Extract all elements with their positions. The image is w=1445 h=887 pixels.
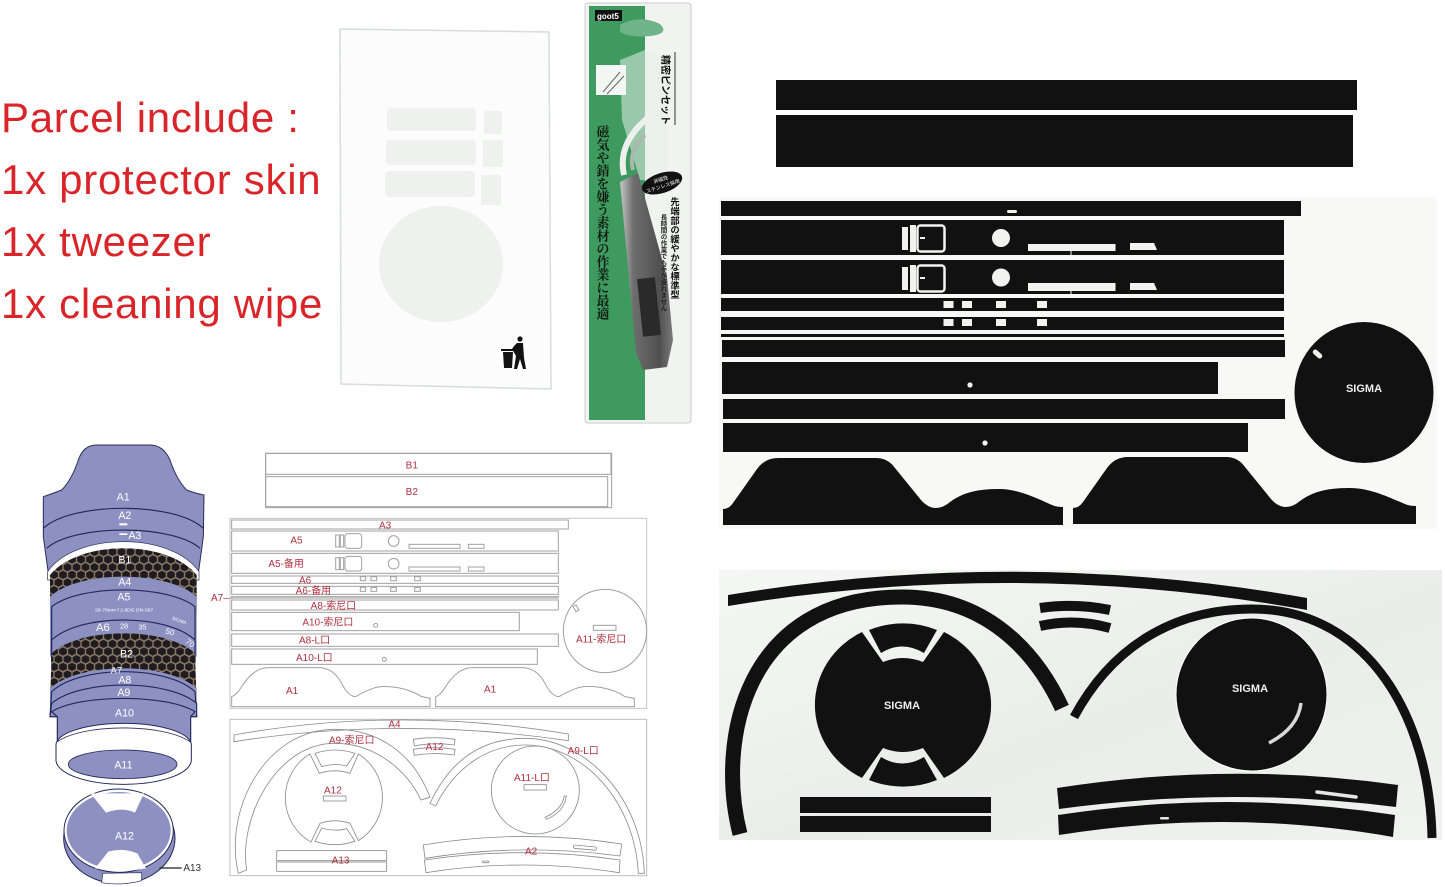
labels: A1 [286, 686, 299, 697]
labels [268, 460, 626, 697]
text: cleaning wipe: 1x cleaning wipe [1, 280, 323, 327]
B1 honeycomb band [50, 548, 197, 613]
callout line to A13 [159, 866, 182, 870]
part labels: A6 [96, 622, 110, 634]
labels: A12 [426, 742, 444, 753]
text: small note: 長時間の作業でも手が疲れません [659, 214, 669, 312]
A9 left outline [235, 729, 430, 873]
A2 curved strips [1057, 774, 1398, 837]
part labels: A11 [114, 760, 133, 772]
A9 thin arc [1074, 609, 1432, 838]
front ring and A11 [56, 723, 191, 784]
panel: template outline sheet one [230, 453, 647, 708]
lens cap A12 [64, 789, 175, 884]
labels: A10-L口 [296, 653, 333, 664]
part labels: 35 [138, 622, 146, 631]
labels: A5-备用 [268, 557, 304, 570]
label: A7 callout: A7— [211, 593, 233, 604]
part labels: A4 [118, 577, 131, 589]
labels: A6-备用 [296, 584, 331, 597]
A4 outline [234, 720, 568, 742]
A9 right outline [430, 738, 644, 873]
labels: A1 [484, 684, 497, 695]
panel: tweezer package [585, 3, 691, 423]
panel: black skin sheet two [719, 570, 1442, 840]
diagram: lens with skin parts [43, 445, 204, 884]
text: protector skin: 1x protector skin [1, 156, 321, 203]
labels: A8-索尼口 [311, 599, 356, 612]
part labels: B1 [118, 555, 131, 567]
part labels: 70 [184, 637, 197, 650]
A1 skin shapes [723, 457, 1416, 525]
labels: A9-L口 [568, 746, 599, 757]
labels: A11-L口 [514, 773, 550, 784]
part labels: A5 [117, 591, 130, 603]
part labels: A9 [117, 687, 130, 699]
A11 disc: SIGMA [1232, 683, 1268, 695]
A11 circle [563, 589, 647, 673]
B2 honeycomb band [50, 633, 197, 703]
A4 A5 A6 bands [50, 577, 197, 663]
hood body A1 [43, 445, 204, 573]
labels: A10-索尼口 [302, 615, 353, 628]
tweezer [620, 98, 673, 370]
text: right slogan: 先端部の緩やかな標準型 [668, 196, 682, 299]
part labels: 28-70mm f 2.8DG DN·067 [95, 608, 153, 614]
A7 A8 A9 A10 bands [50, 668, 197, 743]
heading: parcel contents list [1, 94, 323, 327]
part labels: A8 [118, 675, 131, 687]
A4 arc [728, 572, 1307, 610]
labels: A9-索尼口 [329, 733, 374, 746]
A9 large arc [733, 597, 1062, 834]
badge [639, 167, 685, 199]
part labels: A7 [111, 665, 122, 675]
A11 outline [491, 746, 579, 834]
part labels: B2 [120, 648, 133, 660]
logo: goot5 [597, 12, 619, 21]
part labels: A13 [183, 863, 202, 874]
part labels: SIGMA [171, 616, 188, 626]
part labels: A12 [115, 831, 134, 843]
A11 disc [1176, 618, 1327, 771]
part labels: 28 [120, 622, 128, 631]
B strips outline [266, 453, 612, 508]
A1 outlines [232, 668, 430, 707]
badge: 非磁性 [653, 174, 669, 185]
part labels [95, 491, 202, 874]
icon: litter bin [501, 336, 526, 369]
text: product name: 精密ピンセット [659, 55, 674, 125]
panel: cleaning wipe packet [340, 29, 551, 389]
small curved strips [1040, 606, 1110, 628]
part labels: A1 [117, 491, 130, 503]
labels [324, 719, 599, 866]
panel: black skin sheet one [719, 197, 1437, 529]
labels: B2 [406, 487, 418, 498]
lens cap disc with logo: SIGMA [1346, 383, 1382, 395]
labels: A12 [324, 785, 342, 796]
labels: A3 [379, 520, 392, 531]
logo [595, 10, 622, 21]
A12 outline [285, 750, 382, 845]
A12 cap disc: SIGMA [884, 700, 920, 712]
text: tweezer: 1x tweezer [1, 218, 211, 265]
part labels: A2 [118, 510, 131, 522]
labels: A11-索尼口 [576, 632, 626, 645]
labels: A5 [290, 535, 303, 546]
labels: B1 [406, 460, 418, 471]
part labels: A10 [115, 707, 134, 719]
labels: A8-L口 [299, 636, 330, 647]
band lines [43, 508, 203, 548]
part labels: 50 [164, 627, 176, 638]
panel: honeycomb strips sheet [776, 80, 1357, 167]
part labels: A3 [128, 530, 141, 542]
A12 cap disc [815, 623, 991, 787]
badge: ステンレス採用 [645, 178, 681, 195]
lens cap disc with logo [1294, 322, 1434, 463]
labels: A4 [388, 719, 401, 730]
labels: A6 [299, 576, 312, 587]
text: left slogan: 磁気や錆を嫌う素材の作業に最適 [594, 124, 612, 320]
labels: A13 [332, 855, 350, 866]
A13 strips [800, 797, 991, 832]
panel: template outline sheet two [230, 719, 647, 876]
text: parcel include: Parcel include : [1, 94, 300, 141]
labels: A2 [525, 846, 538, 857]
A5 cut-outs [336, 534, 484, 661]
